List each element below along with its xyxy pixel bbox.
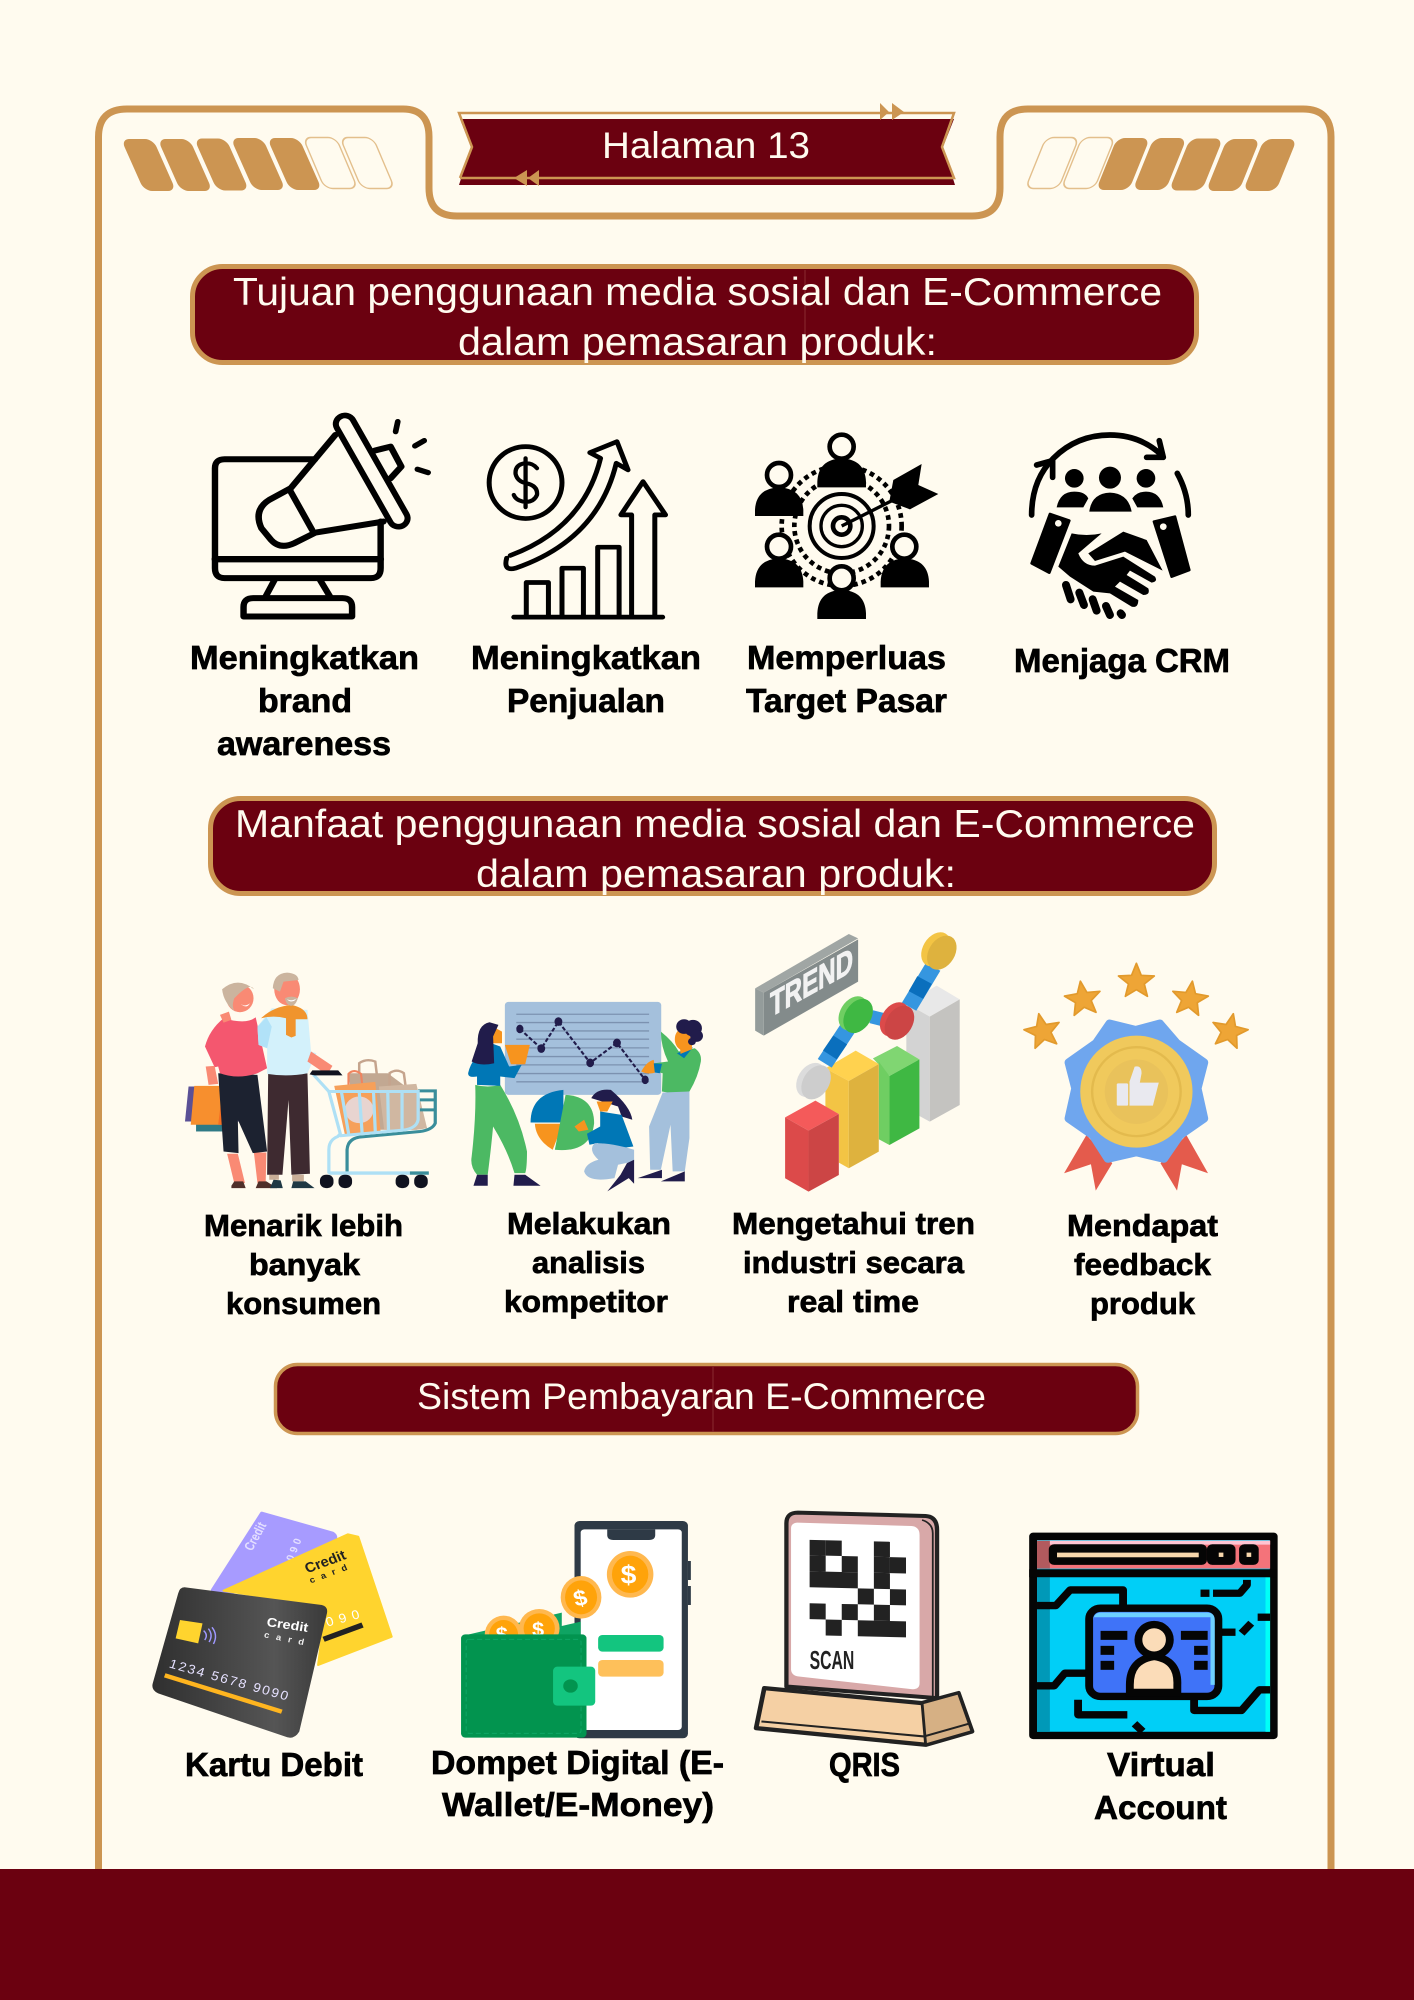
section banner: tujuan bbox=[192, 266, 1196, 364]
section banner: tujuan: dalam pemasaran produk: bbox=[458, 321, 937, 364]
label: memperluas target pasar: Memperluas bbox=[747, 639, 946, 676]
illustration: digital wallet and phone: $ bbox=[496, 1624, 508, 1646]
illustration: competitor analysis bbox=[468, 1002, 703, 1191]
illustration: debit cards: card bbox=[308, 1563, 349, 1585]
label: menjaga crm: Menjaga CRM bbox=[1014, 642, 1230, 679]
label: memperluas target pasar: Target Pasar bbox=[746, 682, 947, 719]
illustration: debit cards bbox=[152, 1513, 392, 1738]
label: virtual account: Virtual bbox=[1107, 1746, 1215, 1783]
label: dompet digital: Wallet/E-Money) bbox=[442, 1786, 714, 1823]
label: qris: QRIS bbox=[829, 1746, 900, 1783]
label: menarik lebih banyak konsumen bbox=[204, 1208, 403, 1321]
label: mengetahui tren industri: Mengetahui tren bbox=[732, 1206, 975, 1241]
illustration: qris stand bbox=[756, 1513, 972, 1745]
illustration: debit cards: card bbox=[263, 1630, 305, 1647]
icon: sales growth bbox=[489, 442, 666, 617]
illustration: virtual account window bbox=[1029, 1536, 1277, 1735]
label: meningkatkan penjualan: Penjualan bbox=[507, 682, 665, 719]
label: meningkatkan brand awareness: awareness bbox=[217, 725, 391, 762]
label: mengetahui tren industri: real time bbox=[787, 1284, 919, 1319]
label: meningkatkan penjualan bbox=[471, 639, 701, 719]
illustration: isometric trend chart: TREND bbox=[770, 940, 853, 1025]
label: mendapat feedback produk: produk bbox=[1090, 1286, 1196, 1321]
illustration: debit cards: 1234 5678 9090 bbox=[167, 1656, 290, 1703]
label: mendapat feedback produk: Mendapat bbox=[1067, 1208, 1218, 1243]
illustration: debit cards: Credit bbox=[303, 1548, 349, 1577]
illustration: digital wallet and phone: $ bbox=[532, 1619, 544, 1641]
label: kartu debit: Kartu Debit bbox=[185, 1746, 363, 1783]
label: melakukan analisis kompetitor: Melakukan bbox=[507, 1206, 671, 1241]
page frame bbox=[98, 109, 1331, 1870]
illustration: couple shopping bbox=[185, 973, 435, 1188]
label: menarik lebih banyak konsumen: konsumen bbox=[226, 1286, 381, 1321]
label: mendapat feedback produk: feedback bbox=[1074, 1247, 1212, 1282]
icon: megaphone on monitor bbox=[215, 422, 428, 616]
footer band bbox=[0, 1869, 1414, 2000]
illustration: debit cards: Credit bbox=[241, 1519, 270, 1553]
label: mendapat feedback produk bbox=[1067, 1208, 1218, 1321]
label: melakukan analisis kompetitor: kompetitor bbox=[504, 1284, 668, 1319]
section banner: sistem pembayaran: Sistem Pembayaran E-Commerce bbox=[417, 1376, 986, 1417]
section banner: tujuan: Tujuan penggunaan media sosial dan E-Commerce bbox=[233, 271, 1162, 314]
illustration: digital wallet and phone: $ bbox=[621, 1559, 636, 1589]
illustration: debit cards: 090 bbox=[324, 1607, 361, 1629]
label: memperluas target pasar bbox=[746, 639, 947, 719]
decorative stripes right bbox=[1025, 138, 1297, 191]
section banner: sistem pembayaran bbox=[276, 1364, 1138, 1434]
icon: target market bbox=[755, 435, 938, 619]
illustration: isometric trend chart bbox=[755, 927, 963, 1192]
label: meningkatkan penjualan: Meningkatkan bbox=[471, 639, 701, 676]
label: mengetahui tren industri bbox=[732, 1206, 975, 1319]
label: virtual account bbox=[1094, 1746, 1227, 1826]
label: dompet digital bbox=[431, 1744, 724, 1823]
decorative stripes left bbox=[121, 138, 395, 191]
illustration: digital wallet and phone: $ bbox=[570, 1584, 590, 1611]
label: meningkatkan brand awareness: brand bbox=[258, 682, 352, 719]
label: menarik lebih banyak konsumen: banyak bbox=[249, 1247, 361, 1282]
section banner: manfaat: Manfaat penggunaan media sosial dan E-Commerce bbox=[235, 803, 1195, 846]
section banner: manfaat bbox=[210, 798, 1214, 896]
illustration: qris stand: SCAN bbox=[810, 1646, 854, 1675]
illustration: debit cards: 090 bbox=[285, 1537, 305, 1563]
label: meningkatkan brand awareness: Meningkatkan bbox=[190, 639, 419, 676]
label: menarik lebih banyak konsumen: Menarik lebih bbox=[204, 1208, 403, 1243]
title text: Halaman 13 bbox=[602, 125, 810, 166]
label: dompet digital: Dompet Digital (E- bbox=[431, 1744, 724, 1781]
label: mengetahui tren industri: industri secara bbox=[743, 1245, 965, 1280]
label: meningkatkan brand awareness bbox=[190, 639, 419, 762]
label: melakukan analisis kompetitor bbox=[504, 1206, 671, 1319]
illustration: digital wallet and phone bbox=[461, 1521, 691, 1738]
illustration: debit cards: Credit bbox=[266, 1615, 310, 1635]
label: melakukan analisis kompetitor: analisis bbox=[532, 1245, 645, 1280]
label: virtual account: Account bbox=[1094, 1789, 1227, 1826]
title ribbon bbox=[459, 103, 955, 186]
illustration: feedback medal bbox=[1021, 963, 1251, 1191]
section banner: manfaat: dalam pemasaran produk: bbox=[476, 853, 956, 896]
icon: customer relationship handshake bbox=[1032, 435, 1189, 615]
